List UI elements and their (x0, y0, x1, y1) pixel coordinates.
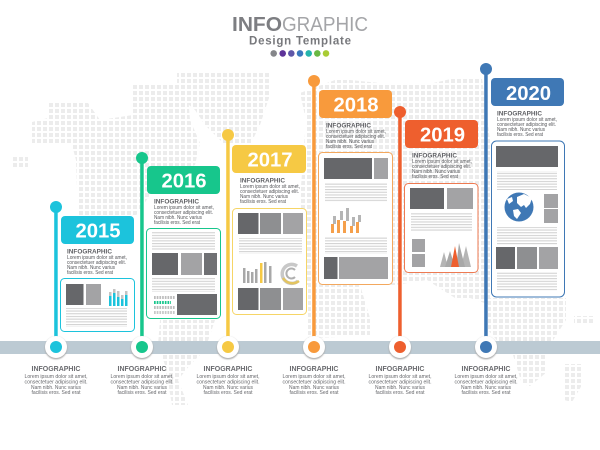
bottom caption 2015: Nam nibh. Nunc varius (31, 385, 81, 391)
year box 2017: 2017 (247, 150, 293, 172)
text block 2017: facilisis eros. Sed erat (240, 199, 286, 205)
text block 2020: facilisis eros. Sed erat (497, 132, 543, 138)
icon: globe (504, 192, 534, 222)
bottom caption 2020: Lorem ipsum dolor sit amet, (454, 374, 518, 380)
mountain chart 2019 (440, 243, 471, 267)
text block 2016: Lorem ipsum dolor sit amet, (154, 205, 214, 211)
text block 2015: INFOGRAPHIC (67, 248, 112, 256)
milestone 2018 (303, 75, 392, 359)
bottom caption 2017 (196, 364, 260, 396)
bar chart 2018 (331, 208, 361, 233)
bottom caption 2019: Lorem ipsum dolor sit amet, (368, 374, 432, 380)
bottom caption 2017: Lorem ipsum dolor sit amet, (196, 374, 260, 380)
text block 2016: facilisis eros. Sed erat (154, 220, 200, 226)
year box 2018: 2018 (333, 94, 379, 116)
panel 2016 (146, 228, 220, 318)
year box 2020 (491, 78, 564, 106)
panel 2017 (232, 208, 306, 314)
text block 2018: INFOGRAPHIC (326, 122, 371, 130)
text block 2017: Nam nibh. Nunc varius (240, 194, 288, 200)
bottom caption 2016: INFOGRAPHIC (118, 364, 167, 373)
year box 2017 (232, 145, 306, 173)
bottom caption 2019: facilisis eros. Sed erat (376, 390, 425, 396)
year box 2016 (147, 166, 220, 194)
bottom caption 2020: INFOGRAPHIC (462, 364, 511, 373)
milestone 2020 (475, 63, 564, 359)
text block 2020: INFOGRAPHIC (497, 110, 542, 118)
bottom caption 2020 (454, 364, 518, 396)
bar chart 2017 (243, 262, 272, 283)
text block 2018: facilisis eros. Sed erat (326, 144, 372, 150)
bottom caption 2019: consectetuer adipiscing elit. (368, 380, 432, 386)
milestone 2019 (389, 106, 478, 359)
text block 2015: Lorem ipsum dolor sit amet, (67, 255, 127, 261)
donut chart 2017 (282, 264, 299, 283)
stem 2020 (475, 63, 497, 359)
bottom caption 2016: Nam nibh. Nunc varius (117, 385, 167, 391)
text block 2017: INFOGRAPHIC (240, 178, 285, 184)
text block 2019: Lorem ipsum dolor sit amet, (412, 159, 472, 165)
title: INFO (232, 13, 282, 36)
year box 2019 (405, 120, 478, 148)
bottom caption 2018: consectetuer adipiscing elit. (282, 380, 346, 386)
bar chart 2015 (109, 289, 128, 306)
panel 2019 (404, 184, 478, 272)
text block 2017: Lorem ipsum dolor sit amet, (240, 184, 300, 190)
title: GRAPHIC (282, 13, 368, 36)
year box 2015: 2015 (75, 220, 121, 242)
title colour dots (270, 50, 329, 57)
bottom caption 2019: INFOGRAPHIC (376, 364, 425, 373)
year box 2018 (319, 90, 392, 118)
title: Design Template (249, 36, 351, 48)
bottom caption 2017: facilisis eros. Sed erat (204, 390, 253, 396)
bottom caption 2018: facilisis eros. Sed erat (290, 390, 339, 396)
text block 2020: Nam nibh. Nunc varius (497, 127, 545, 133)
year box 2020: 2020 (506, 83, 551, 105)
bottom caption 2016: Lorem ipsum dolor sit amet, (110, 374, 174, 380)
stem 2018 (303, 75, 325, 359)
bottom caption 2017: INFOGRAPHIC (204, 364, 253, 373)
text block 2017: consectetuer adipiscing elit. (240, 189, 299, 195)
text block 2016: consectetuer adipiscing elit. (154, 210, 213, 216)
text block 2019 (412, 152, 472, 180)
bottom caption 2018 (282, 364, 346, 396)
milestone 2017 (217, 129, 306, 359)
year box 2019: 2019 (420, 124, 465, 146)
timeline band (0, 341, 600, 354)
year box 2016: 2016 (161, 170, 207, 192)
text block 2020 (497, 110, 557, 138)
text block 2018: Lorem ipsum dolor sit amet, (326, 129, 386, 135)
text block 2018: consectetuer adipiscing elit. (326, 134, 385, 140)
bottom caption 2018: INFOGRAPHIC (290, 364, 339, 373)
text block 2018 (326, 122, 386, 150)
text block 2019: facilisis eros. Sed erat (412, 174, 458, 180)
bottom caption 2017: Nam nibh. Nunc varius (203, 385, 253, 391)
milestone 2016 (131, 152, 220, 359)
text block 2017 (240, 178, 300, 205)
stem 2017 (217, 129, 239, 359)
dot chart 2016 (154, 298, 175, 312)
stem 2016 (131, 152, 153, 359)
text block 2019: Nam nibh. Nunc varius (412, 169, 460, 175)
bottom caption 2016 (110, 364, 174, 396)
text block 2020: consectetuer adipiscing elit. (497, 122, 556, 128)
bottom caption 2020: Nam nibh. Nunc varius (461, 385, 511, 391)
bottom caption 2020: facilisis eros. Sed erat (462, 390, 511, 396)
text block 2015 (67, 248, 127, 276)
text block 2018: Nam nibh. Nunc varius (326, 139, 374, 145)
panel 2015 (60, 278, 134, 332)
bottom caption 2015: INFOGRAPHIC (32, 364, 81, 373)
bottom caption 2016: consectetuer adipiscing elit. (110, 380, 174, 386)
title (232, 13, 368, 48)
milestone 2015 (45, 201, 135, 359)
text block 2016: Nam nibh. Nunc varius (154, 215, 202, 221)
bottom caption 2015 (24, 364, 88, 396)
dotted world map background (0, 60, 600, 410)
bottom caption 2016: facilisis eros. Sed erat (118, 390, 167, 396)
bottom caption 2019 (368, 364, 432, 396)
text block 2015: Nam nibh. Nunc varius (67, 265, 115, 271)
panel 2020 (492, 141, 564, 297)
text block 2019: consectetuer adipiscing elit. (412, 164, 471, 170)
bottom caption 2017: consectetuer adipiscing elit. (196, 380, 260, 386)
year box 2015 (61, 216, 134, 244)
text block 2015: facilisis eros. Sed erat (67, 270, 113, 276)
text block 2015: consectetuer adipiscing elit. (67, 260, 126, 266)
bottom caption 2015: Lorem ipsum dolor sit amet, (24, 374, 88, 380)
text block 2020: Lorem ipsum dolor sit amet, (497, 117, 557, 123)
text block 2019: INFOGRAPHIC (412, 152, 457, 160)
bottom caption 2018: Lorem ipsum dolor sit amet, (282, 374, 346, 380)
stem 2015 (45, 201, 67, 359)
bottom caption 2018: Nam nibh. Nunc varius (289, 385, 339, 391)
bottom caption 2015: consectetuer adipiscing elit. (24, 380, 88, 386)
panel 2018 (318, 152, 392, 284)
bottom caption 2015: facilisis eros. Sed erat (32, 390, 81, 396)
stem 2019 (389, 106, 411, 359)
text block 2016 (154, 198, 214, 226)
bottom caption 2019: Nam nibh. Nunc varius (375, 385, 425, 391)
text block 2016: INFOGRAPHIC (154, 198, 199, 206)
bottom caption 2020: consectetuer adipiscing elit. (454, 380, 518, 386)
